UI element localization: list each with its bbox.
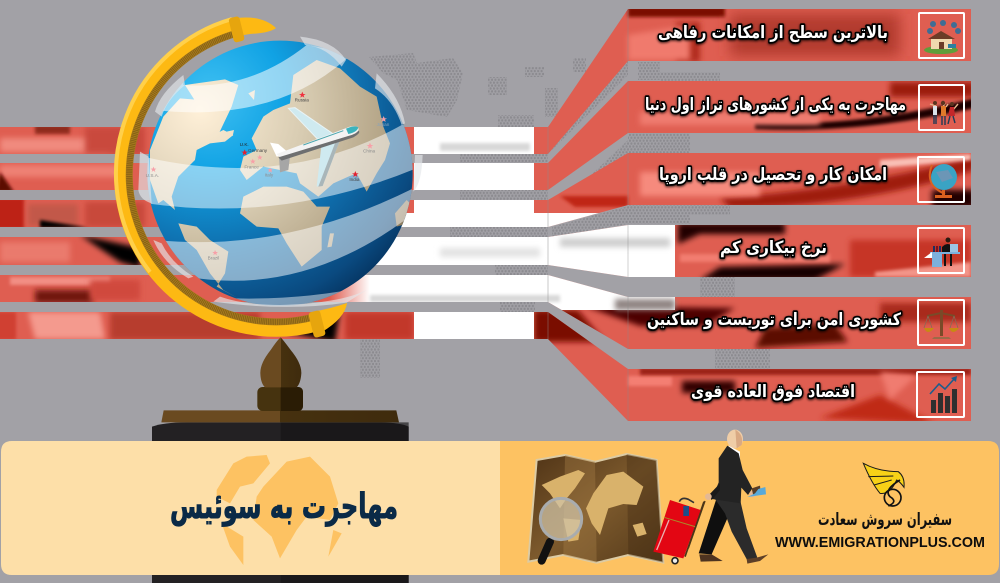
- wooden collar: [257, 387, 303, 411]
- icon: cheering people: [919, 85, 964, 130]
- graduated scale: [129, 33, 315, 322]
- magnifying glass: [542, 542, 550, 561]
- globe: [138, 37, 423, 310]
- band 4 text: نرخ بیکاری کم: [720, 238, 827, 258]
- gold meridian arc: [116, 16, 347, 338]
- walking businessman: [688, 430, 768, 564]
- wooden base plate: [161, 410, 399, 422]
- top arc tip and collar: [237, 17, 276, 36]
- icon: house: [919, 13, 964, 58]
- band 6 text: اقتصاد فوق العاده قوی: [691, 382, 855, 402]
- company logo: [863, 463, 904, 506]
- world map watermark: [217, 455, 342, 565]
- city markers and labels: Germany: [248, 148, 268, 153]
- city markers and labels: Russia: [295, 98, 309, 103]
- band 1 content: [658, 13, 964, 58]
- city markers and labels: China: [363, 149, 376, 154]
- black plinth: [152, 422, 409, 583]
- band 6 content: [691, 372, 964, 417]
- city markers and labels: [146, 92, 390, 260]
- white cross of the flag: [330, 120, 675, 345]
- band 5 text: کشوری امن برای توریست و ساکنین: [647, 310, 901, 330]
- city markers and labels: U.K.: [240, 142, 249, 147]
- icon: balance scale: [918, 300, 964, 345]
- folded map illustration: [528, 454, 663, 563]
- airplane: [270, 108, 359, 187]
- translucent white bands across globe: [143, 45, 420, 310]
- heading: مهاجرت به سوئیس: [170, 487, 398, 527]
- city markers and labels: U.S.A.: [146, 173, 159, 178]
- city markers and labels: France: [244, 165, 259, 170]
- wooden neck: [260, 337, 301, 387]
- band 5 content: [647, 300, 964, 345]
- city markers and labels: Brazil: [208, 255, 219, 260]
- shading on white cross: [370, 143, 675, 310]
- band 3 text: امکان کار و تحصیل در قلب اروپا: [659, 165, 887, 185]
- red and white flag ribbons: [0, 0, 1000, 430]
- band edges outside globe: [138, 37, 423, 307]
- band 1 text: بالاترین سطح از امکانات رفاهی: [658, 23, 888, 43]
- panel: brand: [500, 430, 999, 575]
- panel: title: [1, 441, 500, 575]
- dotted world map background: [360, 42, 770, 378]
- continents: [150, 60, 413, 298]
- band 2 content: [645, 85, 964, 130]
- icon: growth chart: [917, 372, 964, 417]
- city markers and labels: Italy: [265, 173, 274, 178]
- red suitcase: [653, 498, 704, 564]
- globe stand: [152, 337, 409, 583]
- band 4 content: [720, 228, 964, 273]
- band 3 content: [659, 157, 964, 202]
- city markers and labels: Japan: [377, 122, 390, 127]
- silk shading on ribbons: [0, 7, 975, 424]
- website url: WWW.EMIGRATIONPLUS.COM: [775, 534, 985, 551]
- icon: desk globe: [918, 157, 964, 202]
- globe sphere: [147, 41, 413, 306]
- band 2 text: مهاجرت به یکی از کشورهای تراز اول دنیا: [645, 95, 906, 115]
- city markers and labels: India: [349, 177, 360, 182]
- icon: office desk: [918, 228, 964, 273]
- bottom arc tip and collar: [312, 303, 347, 332]
